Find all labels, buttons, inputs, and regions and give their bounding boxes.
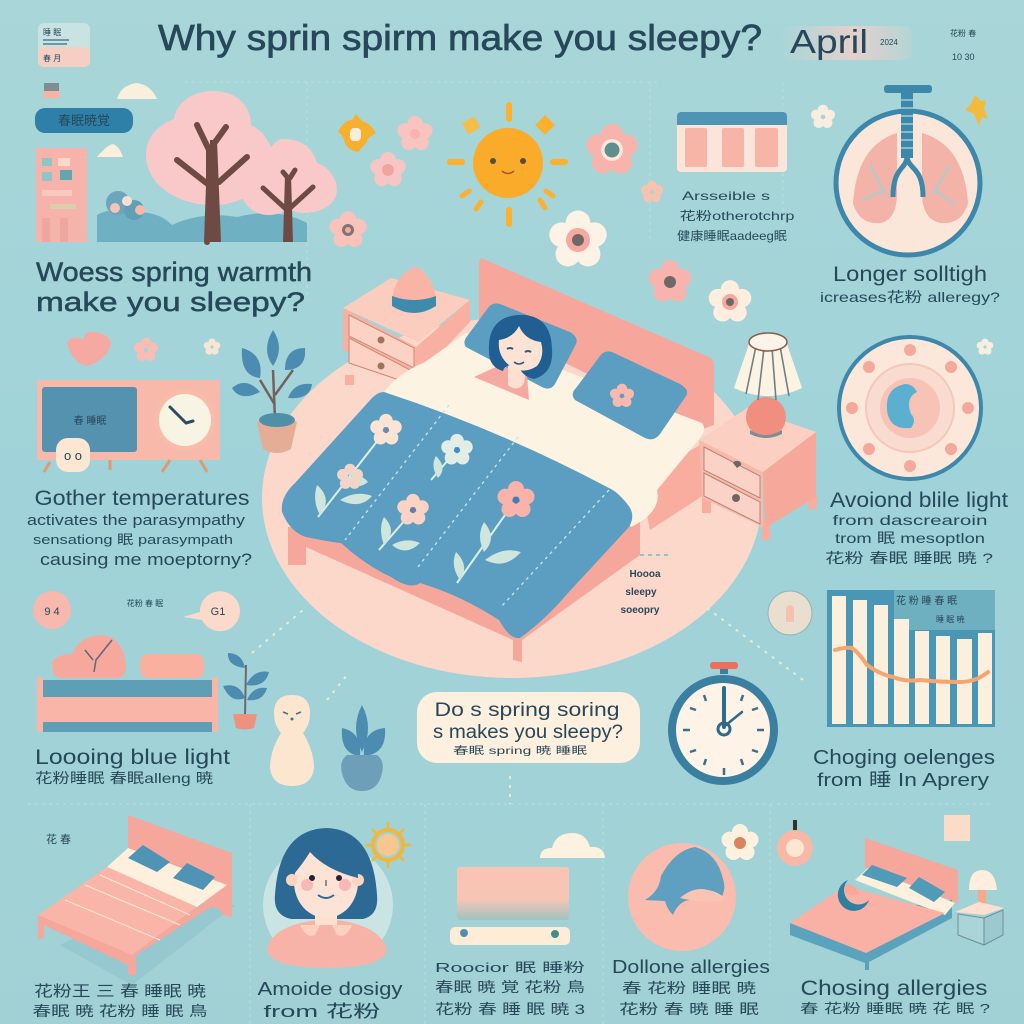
- panel: lungs diagram: [820, 85, 1000, 305]
- flower bush: [106, 191, 145, 220]
- caption: Avoiond blile light: [830, 489, 1008, 512]
- month tag: April: April: [790, 23, 868, 60]
- hills: [97, 210, 307, 242]
- mattress: [384, 333, 704, 527]
- cloud: [117, 83, 157, 99]
- heart decoration: [67, 332, 111, 366]
- panel: sofa: [33, 591, 240, 786]
- panel: air conditioner: [435, 833, 605, 1017]
- blanket flowers: [315, 414, 534, 583]
- caption: Roocior 眠 睡粉: [435, 960, 585, 975]
- blanket seams: [345, 405, 609, 608]
- panel: whale circle: [612, 843, 770, 1017]
- panel: clock and TV: causing me moeptorny?: [40, 550, 252, 569]
- callout: 春眠 spring 暁 睡眠: [453, 744, 587, 757]
- panel: blue light dial: trom 眠 mesoptlon: [835, 530, 985, 546]
- small note: soeopry: [621, 605, 660, 616]
- panel: bar chart: [813, 590, 995, 790]
- panel: bottom bed left: [32, 815, 235, 1019]
- small sun: [377, 834, 399, 856]
- note card: 春 月: [43, 53, 61, 63]
- heading: Woess spring warmth: [36, 257, 312, 287]
- panel: blue light dial: from dascrearoin: [832, 512, 988, 528]
- panel: bar chart: 睡 眠 暁: [936, 615, 964, 624]
- month tag: April: 2024: [880, 38, 898, 47]
- left nightstand: [343, 266, 470, 397]
- panel: clock and TV: sensationg 眠 parasympath: [33, 532, 233, 547]
- panel: striped board: [677, 112, 795, 243]
- caption: Amoide dosigy: [258, 979, 402, 999]
- month tag: April: 花粉 春: [950, 28, 976, 38]
- small lamp: [969, 870, 997, 890]
- panel: whale circle: 花粉 春 暁 睡 眠: [619, 1001, 759, 1017]
- panel: striped board: 健康睡眠aadeeg眠: [677, 228, 787, 243]
- heading: make you sleepy?: [36, 287, 305, 317]
- board: [37, 380, 220, 460]
- panel: bottom bed left: 花 春: [46, 833, 71, 846]
- panel: blue light dial: [825, 337, 1008, 566]
- big tree: [146, 91, 273, 242]
- panel: bottom bed left: 春眠 暁 花粉 睡 眠 鳥: [32, 1003, 208, 1019]
- label pill: [35, 108, 133, 133]
- callout: [417, 692, 640, 763]
- plant: [232, 330, 312, 453]
- note card: 睡 眠: [43, 28, 61, 37]
- heading: [36, 257, 312, 317]
- month tag: April: 10 30: [952, 52, 975, 62]
- panel: clock and TV: o o: [64, 448, 82, 463]
- panel: clock and TV: activates the parasympathy: [27, 512, 246, 529]
- frame: [288, 500, 640, 662]
- note card: [38, 23, 90, 67]
- flowers: [134, 95, 993, 860]
- small note: sleepy: [625, 587, 657, 598]
- caption: Longer solltigh: [833, 263, 987, 286]
- caption: Loooing blue light: [35, 746, 230, 769]
- panel: woman portrait: [258, 822, 411, 1021]
- month tag: April: [782, 23, 976, 62]
- caption: 花粉王 三 春 睡眠 暁: [34, 983, 206, 1000]
- panel: spring warmth: [35, 83, 337, 317]
- panel: woman portrait: from 花粉: [264, 1002, 380, 1021]
- caption: Choging oelenges: [813, 747, 995, 769]
- panel: bar chart: 花 粉 睡 春 眠: [896, 594, 957, 607]
- pillows: [464, 304, 577, 389]
- caption: Dollone allergies: [612, 957, 770, 977]
- label pill: 春眠暁覚: [58, 113, 110, 128]
- panel: lungs diagram: icreases花粉 alleregy?: [820, 289, 1000, 305]
- panel: striped board: Arsseible s: [682, 189, 770, 203]
- lamp: [734, 333, 802, 438]
- vase plant: [341, 705, 385, 791]
- panel: bottom bed right: 春 花粉 睡眠 暁 花 眠 ?: [800, 1001, 990, 1016]
- right nightstand: [699, 408, 817, 540]
- panel: sun and flowers: [134, 95, 993, 860]
- panel: blue light dial: 花粉 春眠 睡眠 暁 ?: [825, 550, 993, 566]
- panel: air conditioner: 春眠 暁 覚 花粉 鳥: [435, 979, 585, 995]
- small plant: [223, 653, 269, 730]
- callout: s makes you sleepy?: [433, 722, 623, 743]
- caption: Chosing allergies: [800, 977, 988, 1000]
- headboard: [479, 258, 714, 430]
- panel: alarm clock: [672, 591, 812, 781]
- panel: sofa: 9 4: [44, 606, 60, 618]
- panel: bar chart: from 睡 In Aprery: [817, 770, 989, 790]
- blanket: [282, 392, 632, 638]
- small tree: [239, 139, 337, 242]
- sun: [450, 105, 565, 224]
- bed illustration: [282, 258, 817, 662]
- callout: Do s spring soring: [434, 700, 620, 721]
- cloud small: [97, 144, 123, 157]
- panel: sofa: G1: [211, 606, 225, 618]
- panel: whale circle: 春 花粉 睡眠 暁: [622, 980, 756, 996]
- sleeper: [474, 315, 552, 400]
- caption: Gother temperatures: [34, 487, 250, 510]
- panel: clock and TV: [27, 332, 252, 569]
- small note: [621, 555, 670, 616]
- panel: bottom bed right: [777, 815, 1004, 1016]
- panel: sofa: 花粉 春 眠: [127, 598, 163, 608]
- small book icon: [43, 83, 60, 98]
- title: Why sprin spirm make you sleepy?: [158, 17, 762, 58]
- panel: air conditioner: 花粉 春 睡 眠 暁 3: [435, 1001, 585, 1017]
- panel: clock and TV: 春 睡眠: [74, 414, 106, 427]
- pink building: [36, 148, 87, 242]
- figurine: [270, 695, 314, 786]
- small note: Hoooa: [629, 569, 661, 580]
- panel: sofa: 花粉睡眠 春眠alleng 暁: [35, 770, 213, 786]
- floor circle: [262, 318, 762, 678]
- panel: striped board: 花粉otherotchrp: [680, 208, 795, 223]
- dashed connectors: [252, 608, 803, 804]
